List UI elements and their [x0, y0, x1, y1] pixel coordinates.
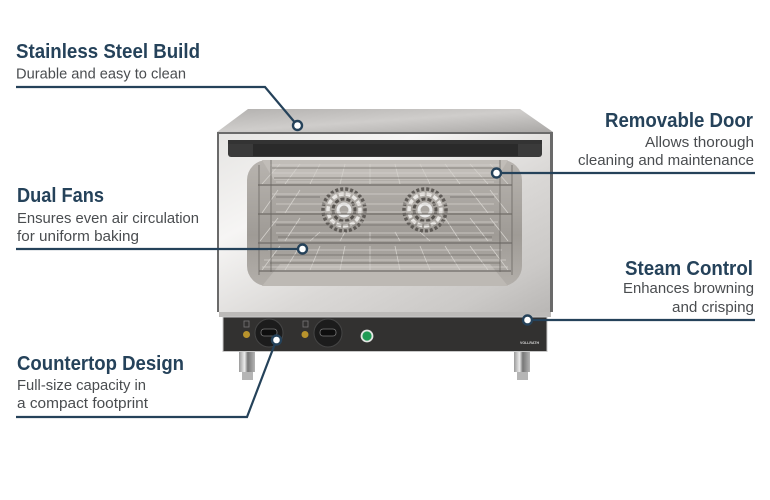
callout: steam control: and crisping [672, 300, 754, 316]
callout: removable door [492, 110, 755, 178]
callout: steam control: Steam Control [625, 258, 753, 280]
door handle [228, 140, 542, 157]
right indicator [302, 321, 308, 338]
callout: dual fans [16, 185, 307, 254]
callout: dual fans: Ensures even air circulation [17, 211, 199, 227]
callout: countertop design: Countertop Design [17, 353, 184, 375]
callout: stainless steel build: Durable and easy to clean [16, 66, 186, 82]
power button [362, 330, 372, 342]
callout: removable door: Removable Door [605, 110, 753, 132]
control panel [223, 317, 547, 352]
callout: countertop design: a compact footprint [17, 396, 148, 412]
callout: stainless steel build: Stainless Steel Build [16, 41, 200, 63]
brand mark: VOLLRATH [520, 341, 539, 345]
left indicator [243, 321, 250, 338]
oven window with racks [247, 160, 522, 286]
callout: stainless steel build [16, 41, 302, 130]
right dial [314, 319, 342, 347]
oven legs [239, 352, 530, 380]
oven illustration [217, 109, 553, 380]
wire racks [258, 160, 512, 275]
callout: steam control: Enhances browning [623, 281, 754, 297]
left dial [255, 319, 283, 347]
callout: dual fans: for uniform baking [17, 229, 139, 245]
callout: dual fans: Dual Fans [17, 185, 104, 207]
oven top panel [217, 109, 553, 132]
fan left [323, 189, 365, 231]
oven door [217, 132, 553, 317]
callout: removable door: cleaning and maintenance [578, 153, 754, 169]
fan right [404, 189, 446, 231]
callout: countertop design [16, 336, 281, 417]
callout: countertop design: Full-size capacity in [17, 378, 146, 394]
callout: removable door: Allows thorough [645, 135, 754, 151]
callout: steam control [523, 258, 755, 324]
